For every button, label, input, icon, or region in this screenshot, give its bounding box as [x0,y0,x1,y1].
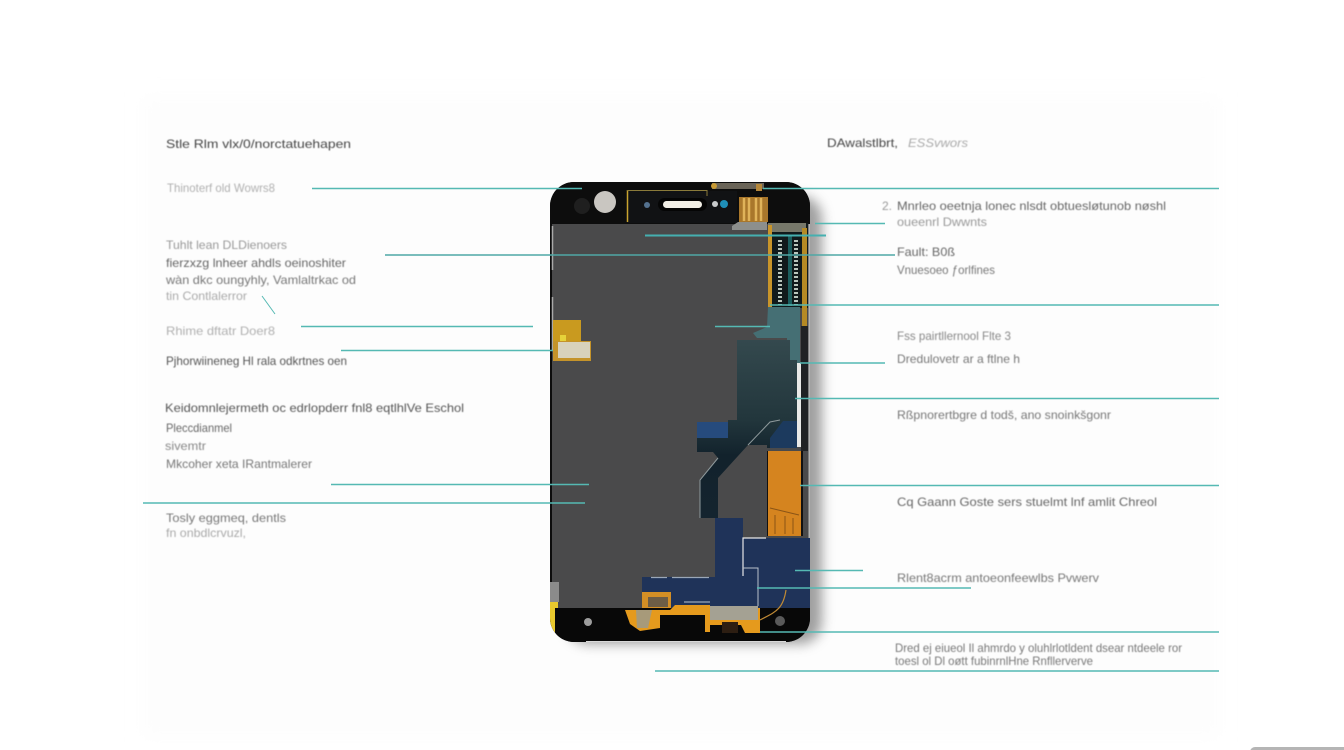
silver trace [700,420,780,518]
right heading: ESSvwors [908,136,968,150]
infographic canvas [143,138,1344,750]
label: board note: Rlent8acrm antoeonfeewlbs Pvwerv [897,571,1099,585]
right flex cable [768,223,808,326]
text block: left description [165,238,356,303]
right rim [808,224,810,538]
left heading: Stle Rlm vlx/0/norctatuehapen [166,137,351,151]
text block: bottom left note: fn onbdlcrvuzl, [166,526,246,540]
left yellow edge [550,602,558,632]
numbered note: oueenrl Dwwnts [897,215,987,229]
proximity lens [594,191,616,213]
bottom screws [584,618,592,626]
right edge components [801,326,808,451]
text block: bottom left note [166,511,286,540]
label: connector left: Pjhorwiineneg Hl rala odkrtnes oen [166,354,347,368]
corner scrollbar remnant [1250,747,1344,750]
label: panel note: Fss pairtllernool Flte 3 [897,329,1011,343]
text block: lower left description [165,401,464,471]
left edge highlights [552,226,554,350]
right heading [827,136,968,150]
text block: lower left description: Mkcoher xeta IRantmalerer [166,457,312,471]
right heading: DAwalstlbrt, [827,136,898,150]
label: fault [897,245,995,277]
numbered note [882,199,1166,229]
phone internals [550,182,810,642]
text block: bottom left note: Tosly eggmeq, dentls [166,511,286,525]
text block: bottom right note: Dred ej eiueol Il ahmrdo y oluhlrlotldent dsear ntdeele ror [895,641,1182,655]
blue right top block [770,421,797,448]
bottom bezel [550,608,810,642]
text block: left description: Tuhlt lean DLDienoers [166,238,287,252]
blue label [697,422,728,438]
label: middle left: Rhime dftatr Doer8 [166,324,275,338]
bottom orange flex [625,590,786,633]
orange battery tab [767,451,803,536]
text block: lower left description: sivemtr [165,439,206,453]
text block: lower left description: Pleccdianmel [166,421,232,435]
phone [550,182,822,644]
label: fault: Fault: B0ß [897,245,955,259]
numbered note: Mnrleo oeetnja lonec nlsdt obtuesløtunob nøshl [897,199,1166,213]
earpiece housing [626,190,728,222]
text block: left description: fierzxzg lnheer ahdls oeinoshiter [166,256,346,270]
text block: bottom right note [895,641,1182,668]
label: driver note: Dredulovetr ar a ftlne h [897,352,1020,366]
front camera [574,198,590,214]
teal circuit board [753,307,800,363]
text block: left description: wàn dkc oungyhly, Vamlaltrkac od [165,273,356,287]
numbered note: 2. [882,199,892,213]
left yellow chip [553,320,591,361]
display back panel [552,224,809,609]
text block: bottom right note: toesl ol Dl oøtt fubinrnlHne Rnfllerverve [895,654,1093,668]
dark navy lower board [642,518,810,608]
label: fault: Vnuesoeo ƒorlfines [897,263,995,277]
background panel [142,97,1220,737]
phone drop shadow [566,196,822,644]
label: shield note: Rßpnorertbgre d todš, ano snoinkšgonr [897,408,1111,422]
text block: left description: tin Contlalerror [166,289,247,303]
phone body [550,182,810,642]
label: battery tab note: Cq Gaann Goste sers stuelmt lnf amlit Chreol [897,495,1157,509]
label: top left: Thinoterf old Wowrs8 [167,181,275,195]
text block: lower left description: Keidomnlejermeth oc edrlopderr fnl8 eqtlhlVe Eschol [165,401,464,415]
white side strip [797,363,801,447]
right column labels [827,136,1182,668]
top bezel [550,182,810,206]
dark shield panel [697,340,797,518]
leader lines [143,188,1219,671]
lower edge glint [586,641,786,642]
top flex connector [711,183,768,230]
left column labels [165,137,464,540]
